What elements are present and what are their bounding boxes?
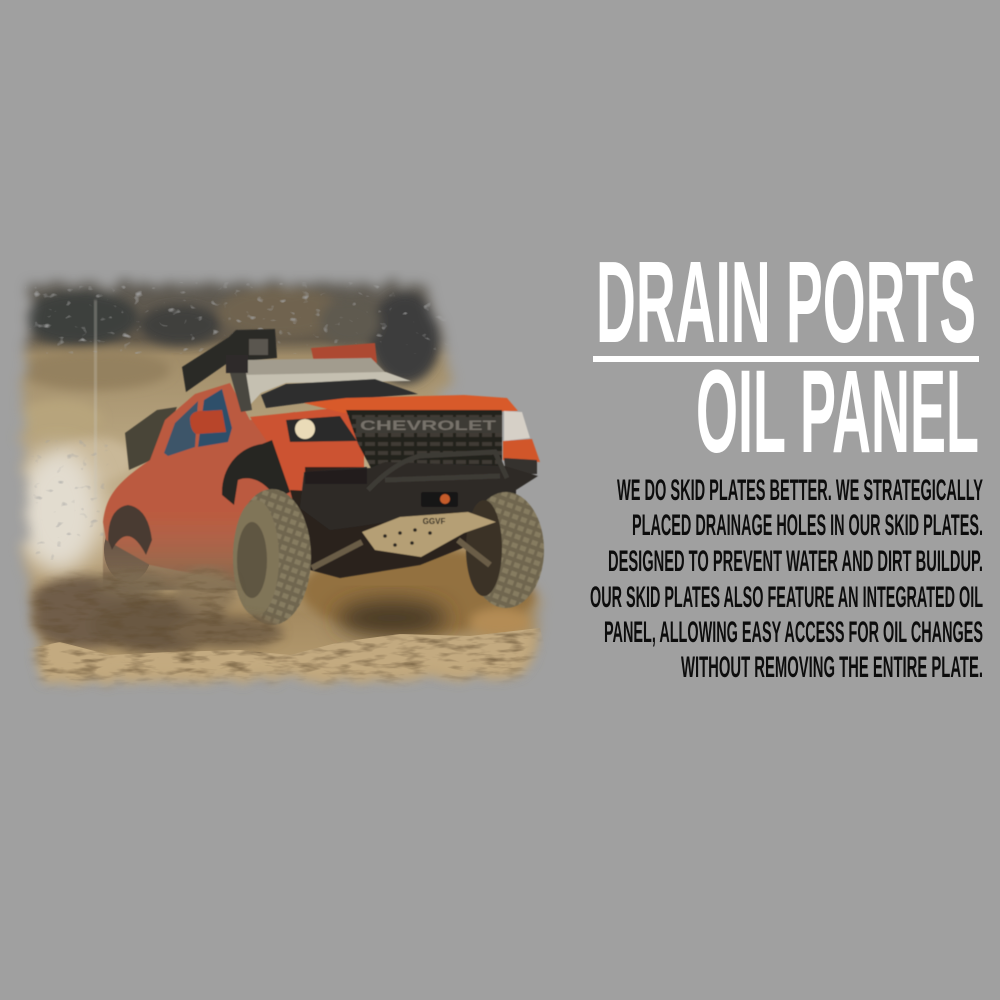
hood (304, 395, 518, 413)
snorkel head (226, 355, 248, 373)
winch (421, 492, 458, 507)
sand ground (32, 628, 542, 688)
fender flare (222, 440, 290, 505)
mirror (190, 410, 226, 434)
bull bar (368, 452, 507, 490)
bumper (300, 462, 538, 530)
skid plate: GGVF (423, 517, 445, 526)
right fender (503, 439, 540, 462)
front fender (250, 407, 364, 495)
light bar (239, 358, 386, 376)
rear window (164, 401, 198, 456)
roof (239, 372, 411, 405)
cooler face (249, 339, 268, 355)
front left tire (233, 489, 311, 625)
suspension arm (312, 540, 490, 568)
dust and sand foreground (26, 568, 542, 688)
left headlight (286, 416, 357, 442)
rear tire (104, 518, 152, 582)
front right tire (466, 492, 544, 608)
divider rule (593, 356, 979, 362)
right vent (504, 458, 537, 474)
windshield (261, 379, 418, 408)
grille badge band (356, 417, 502, 433)
body copy (590, 474, 983, 684)
grille (346, 410, 502, 470)
grille badge band: CHEVROLET (360, 417, 497, 433)
rack cases (182, 329, 277, 392)
side panel (103, 383, 306, 582)
dust cloud (22, 568, 283, 653)
red roof box (311, 343, 377, 363)
right headlight (504, 411, 530, 441)
truck body (103, 329, 544, 625)
snorkel tube (230, 373, 252, 412)
rear wheel arch (108, 505, 152, 555)
photo: truck in desert (0, 270, 570, 700)
side dust shading (103, 510, 300, 590)
skid plate (362, 512, 496, 557)
underbody shadow (290, 490, 510, 578)
side bags (125, 407, 177, 470)
fog vent (305, 467, 367, 484)
front window (198, 389, 232, 447)
desert backdrop (16, 274, 546, 686)
